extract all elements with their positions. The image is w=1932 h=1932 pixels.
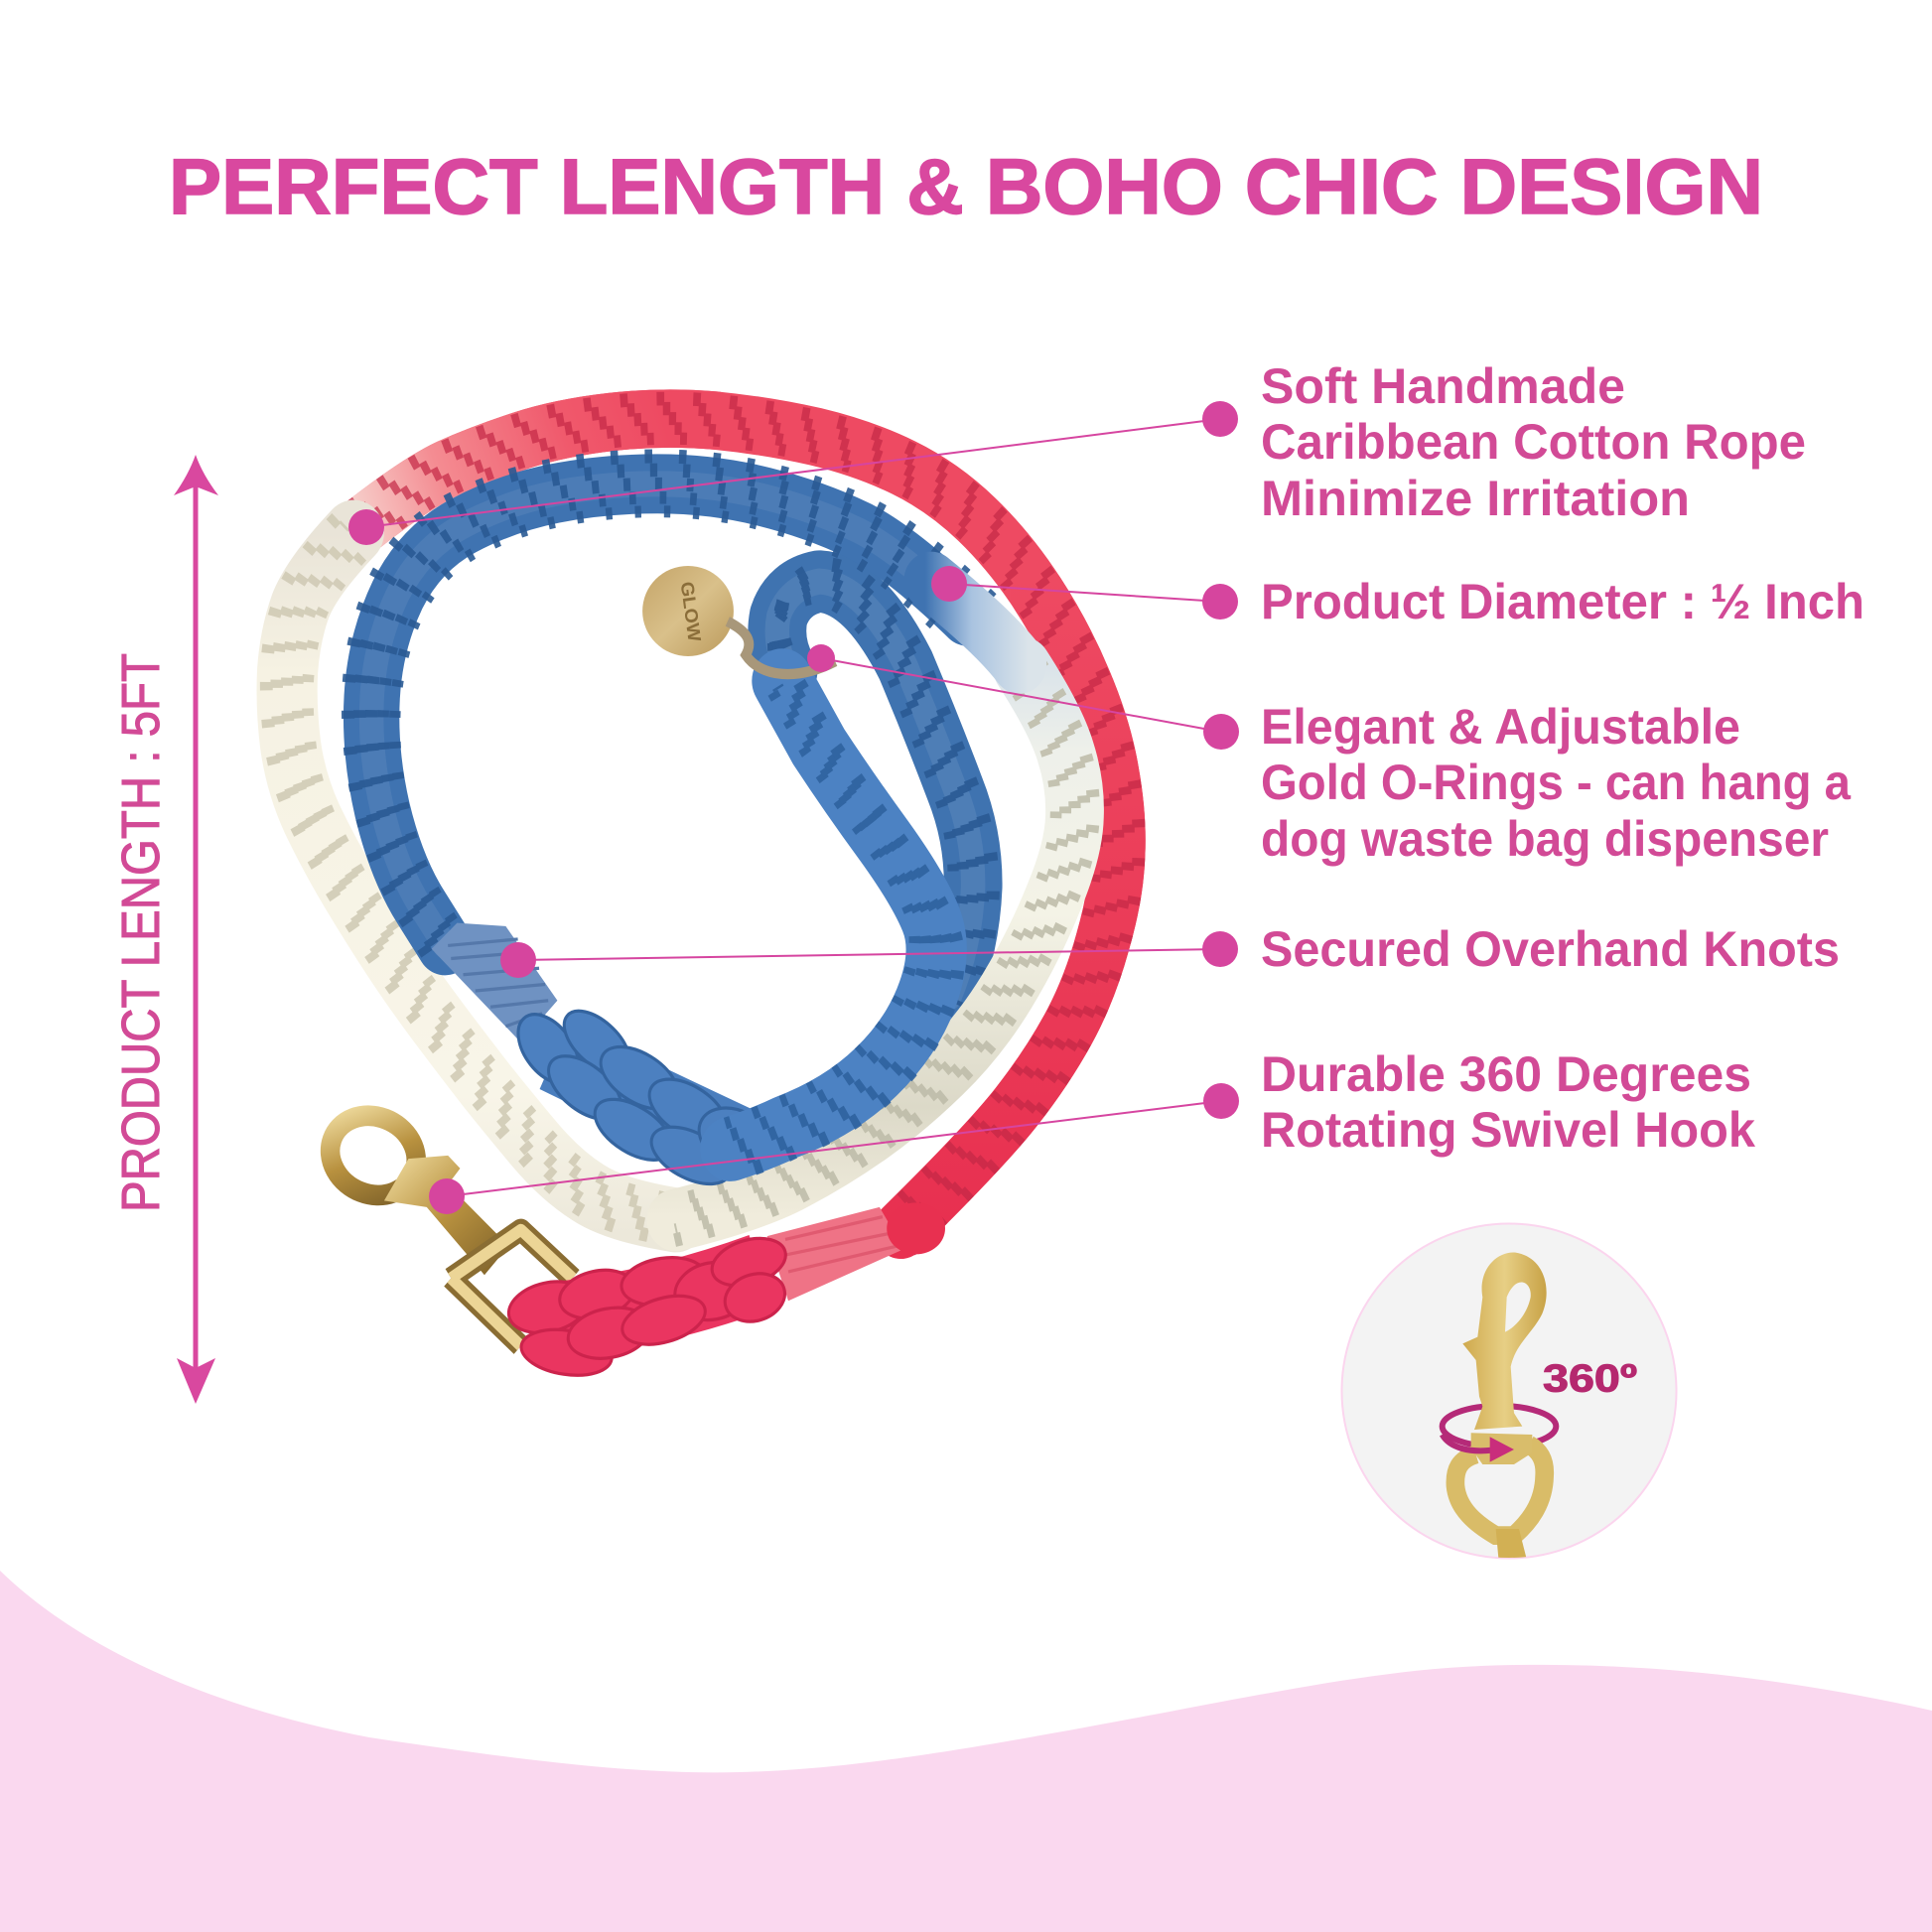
rotation ellipse back <box>1443 1406 1556 1447</box>
callout: o-rings: Gold O-Rings - can hang a <box>1261 755 1852 810</box>
callout: o-rings <box>1203 699 1852 867</box>
callout: cotton rope: Minimize Irritation <box>1261 471 1690 526</box>
blue fade section <box>931 581 1020 664</box>
wrap: red <box>767 1207 903 1301</box>
blue rope main loop <box>348 456 992 955</box>
red braid <box>504 1230 790 1381</box>
o-ring <box>728 621 835 674</box>
red rope <box>337 399 1139 1250</box>
callout: swivel hook <box>1203 1046 1755 1158</box>
background wave <box>0 1571 1932 1932</box>
blue rope front strand <box>725 669 958 1174</box>
blue braid <box>506 999 783 1195</box>
blue rope back loop <box>773 564 993 1014</box>
callout: o-rings: Elegant & Adjustable <box>1261 699 1740 755</box>
label: product length: PRODUCT LENGTH : 5FT <box>111 653 171 1212</box>
blue knot wrap <box>432 923 557 1042</box>
swivel ring <box>1455 1445 1545 1536</box>
title: PERFECT LENGTH & BOHO CHIC DESIGN <box>169 142 1763 230</box>
360 label: 360º <box>1543 1357 1637 1401</box>
arrow: product length <box>174 455 218 1404</box>
callout: knots: Secured Overhand Knots <box>1261 921 1840 977</box>
inset: 360 swivel hook <box>1342 1223 1676 1566</box>
leash illustration <box>266 399 1139 1381</box>
hook <box>320 1103 573 1346</box>
callout dots on leash <box>348 509 967 1214</box>
callout: cotton rope <box>1202 358 1806 526</box>
callout: swivel hook: Rotating Swivel Hook <box>1261 1102 1755 1158</box>
white rope <box>266 518 1093 1240</box>
callout lines <box>366 419 1221 1196</box>
red rope knot end <box>887 1202 945 1254</box>
callout: diameter: Product Diameter : ½ Inch <box>1261 574 1864 629</box>
callout: cotton rope: Caribbean Cotton Rope <box>1261 414 1806 470</box>
callout: o-rings: dog waste bag dispenser <box>1261 811 1829 867</box>
gold tag: GLOW <box>676 581 704 643</box>
gold tag <box>642 566 734 656</box>
callout: cotton rope: Soft Handmade <box>1261 358 1625 414</box>
hook body <box>1462 1253 1547 1430</box>
rotation arrow <box>1443 1435 1492 1450</box>
callout: swivel hook: Durable 360 Degrees <box>1261 1046 1751 1102</box>
